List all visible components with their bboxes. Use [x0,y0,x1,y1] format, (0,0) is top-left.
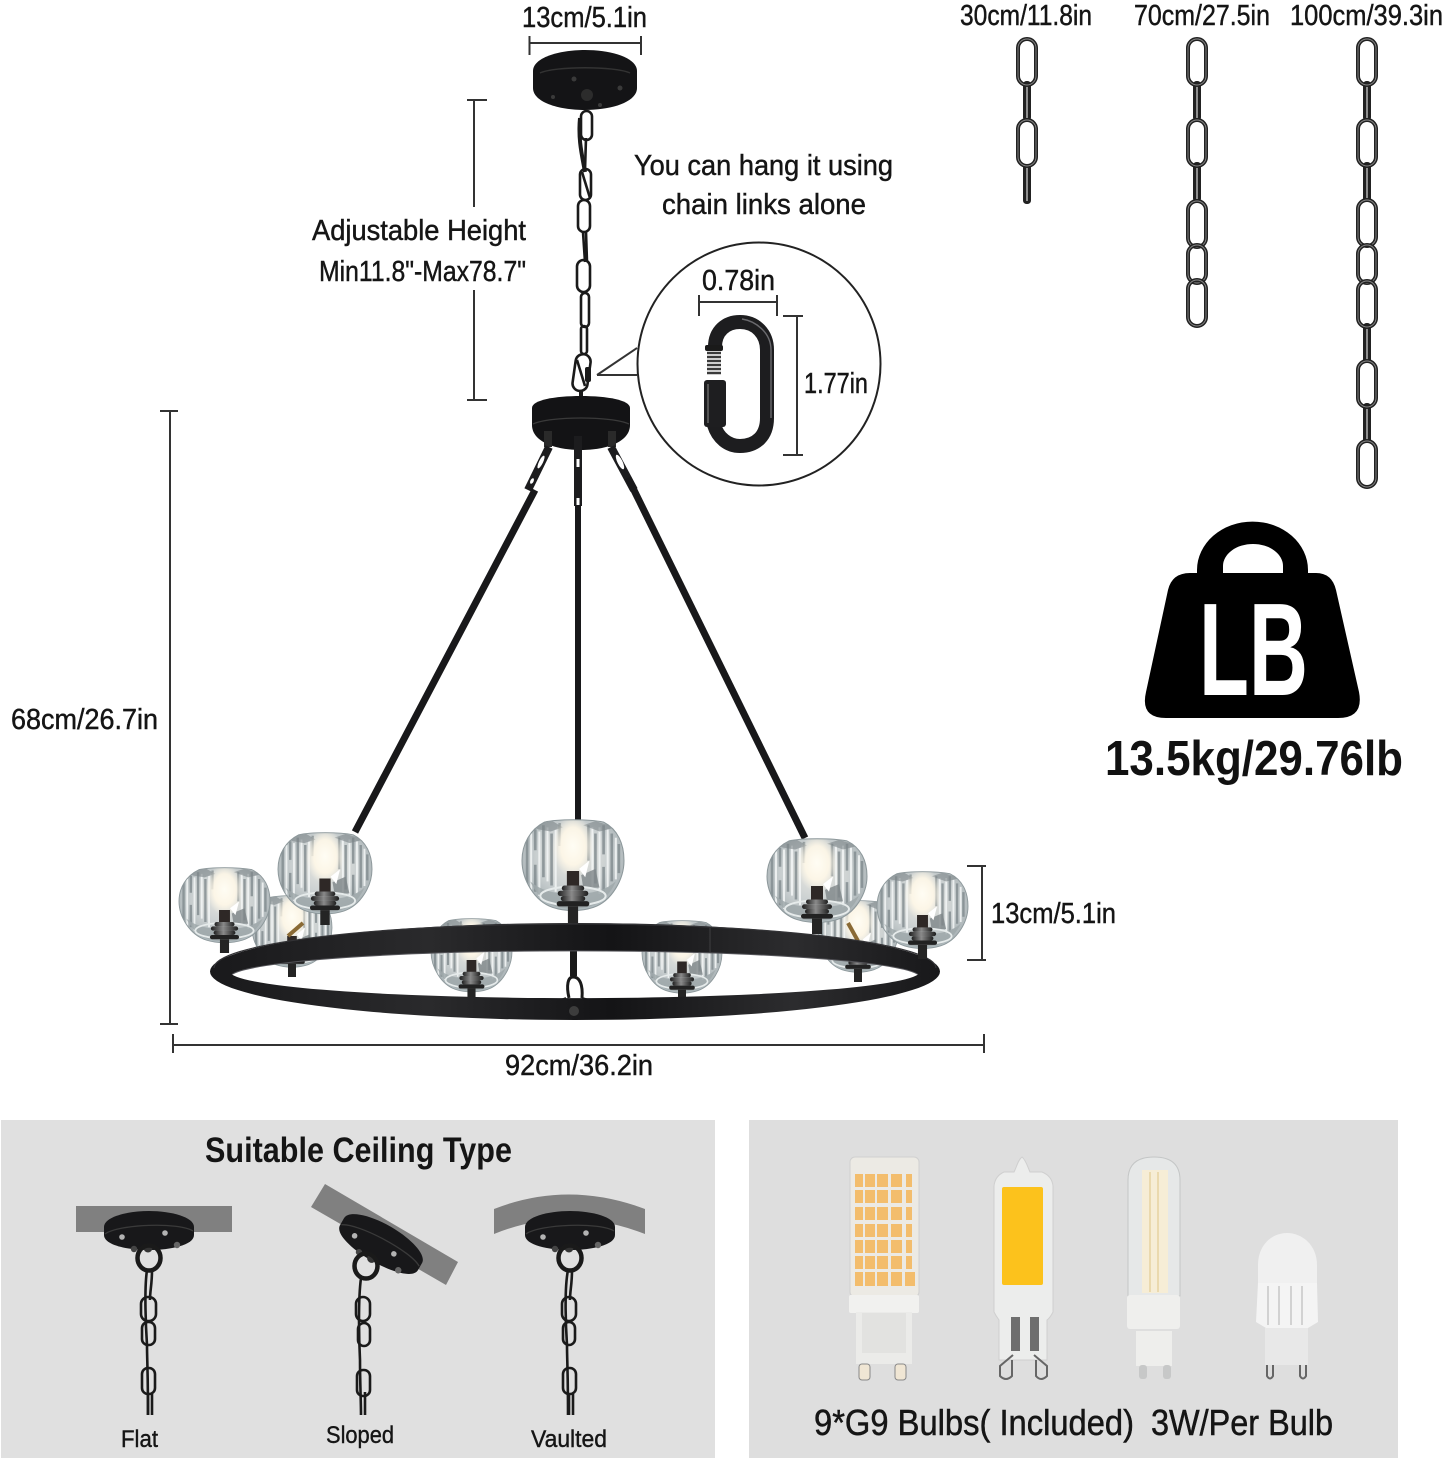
chain option: 30cm [960,0,1092,204]
chain option: 70cm [1134,0,1270,326]
label: link width [699,265,777,316]
note: chain hanging: chain links alone [662,189,866,221]
label: link width: 0.78in [702,265,775,297]
callout: carabiner detail [597,242,880,486]
vaulted ceiling [494,1194,645,1453]
dimension: shade height: 13cm/5.1in [991,898,1116,930]
sloped ceiling: Sloped [326,1422,394,1449]
dimension: adjustable height [312,100,526,400]
panel: suitable ceiling type [1,1120,715,1458]
note: chain hanging: You can hang it using [634,150,893,182]
suspension chain [572,111,592,396]
chain option: 100cm [1290,0,1443,487]
dimension: total height: 68cm/26.7in [11,704,158,736]
shades: back row [252,892,898,1003]
note: chain hanging [634,150,893,221]
sloped ceiling [311,1184,458,1449]
dimension: total height [11,411,178,1024]
panel: bulbs [749,1120,1398,1458]
chain: lower loop [558,950,592,1001]
arms: chains and rods [355,431,805,838]
bulb: clear tube [1127,1157,1180,1379]
label: link height: 1.77in [804,368,868,400]
vaulted ceiling: Vaulted [531,1426,607,1453]
dimension: ring width: 92cm/36.2in [505,1050,653,1082]
ring [210,923,940,1020]
icon: weight [1145,522,1360,723]
dimension: adjustable height: Min11.8"-Max78.7" [319,256,526,288]
chain option: 30cm: 30cm/11.8in [960,0,1092,32]
icon: carabiner [704,319,771,446]
label: link height [783,316,868,455]
dimension: ring width [173,1034,984,1082]
flat ceiling: Flat [121,1426,158,1453]
shades: front row [179,815,968,959]
flat ceiling [76,1206,232,1453]
caption: 9*G9 Bulbs( Included) [814,1402,1134,1443]
dimension: canopy width [522,2,647,55]
caption [814,1402,1333,1443]
dimension: canopy width: 13cm/5.1in [522,2,647,34]
caption: 3W/Per Bulb [1151,1402,1333,1443]
bulb: COB capsule [994,1157,1053,1379]
bulb: ceramic [1256,1233,1318,1378]
chain option: 70cm: 70cm/27.5in [1134,0,1270,32]
bulb: corn LED [849,1157,919,1380]
weight value: 13.5kg/29.76lb [1105,732,1403,786]
dimension: adjustable height: Adjustable Height [312,215,526,247]
heading: Suitable Ceiling Type [205,1131,512,1170]
icon: hub [532,396,630,450]
dimension: shade height [967,866,1116,960]
icon: weight: LB [1199,576,1308,723]
icon: ceiling canopy [533,50,637,110]
